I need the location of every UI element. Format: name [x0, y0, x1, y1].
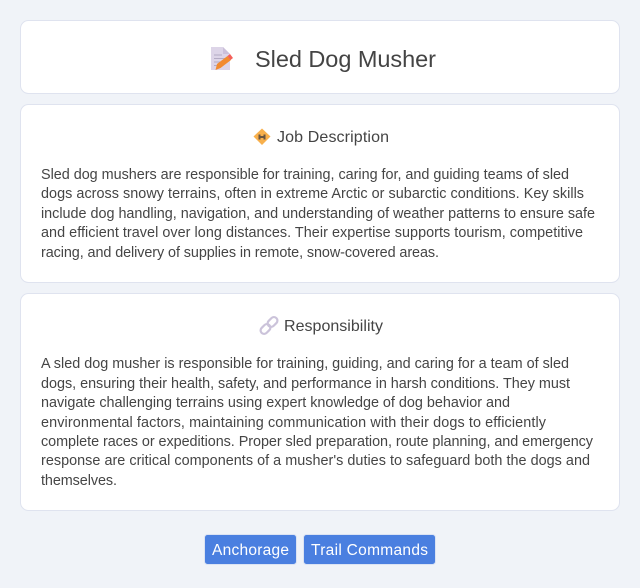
text block: job description: racing, and delivery of supplies in remote, snow-covered areas.: [41, 245, 439, 261]
panel: title card: [20, 20, 620, 94]
text block: responsibility: navigate challenging terrains using expert knowledge of dog behavior and: [41, 395, 510, 411]
button: Anchorage: Anchorage: [212, 542, 289, 559]
heading: responsibility: Responsibility: [284, 318, 383, 335]
button: Trail Commands: Trail Commands: [311, 542, 428, 559]
text block: job description: Sled dog mushers are responsible for training, caring for, and guiding teams of sled: [41, 167, 569, 183]
heading: job description: Job Description: [277, 129, 389, 146]
text block: job description: dogs across snowy terrains, often in extreme Arctic or subarctic conditions. Key skills: [41, 186, 584, 202]
panel: responsibility: [20, 294, 620, 510]
text block: job description: include dog handling, navigation, and understanding of weather patterns to ensure safe: [41, 206, 595, 222]
text block: responsibility: dogs, ensuring their health, safety, and performance in harsh conditions. They must: [41, 376, 570, 392]
button: Anchorage: [204, 534, 296, 564]
text block: responsibility: [41, 356, 594, 489]
icon: chain link: [259, 316, 279, 335]
panel: job description: [20, 104, 620, 282]
text block: responsibility: themselves.: [41, 473, 117, 489]
text block: job description: [41, 167, 595, 261]
text block: responsibility: environmental factors, maintaining communication with their dogs to efficiently: [41, 415, 547, 431]
text block: responsibility: complete races or expeditions. Proper sled preparation, route planning, and emergency: [41, 434, 594, 450]
icon: document with pencil: [211, 47, 233, 70]
text block: responsibility: A sled dog musher is responsible for training, guiding, and caring for a team of sled: [41, 356, 569, 372]
text block: job description: and efficient travel over long distances. Their expertise supports tourism, competitive: [41, 225, 583, 241]
icon: orange diamond sign: [254, 128, 270, 145]
title: Sled Dog Musher: [255, 46, 436, 72]
button: Trail Commands: [304, 534, 436, 564]
text block: responsibility: response are critical components of a musher's duties to safeguard both the dogs and: [41, 453, 590, 469]
